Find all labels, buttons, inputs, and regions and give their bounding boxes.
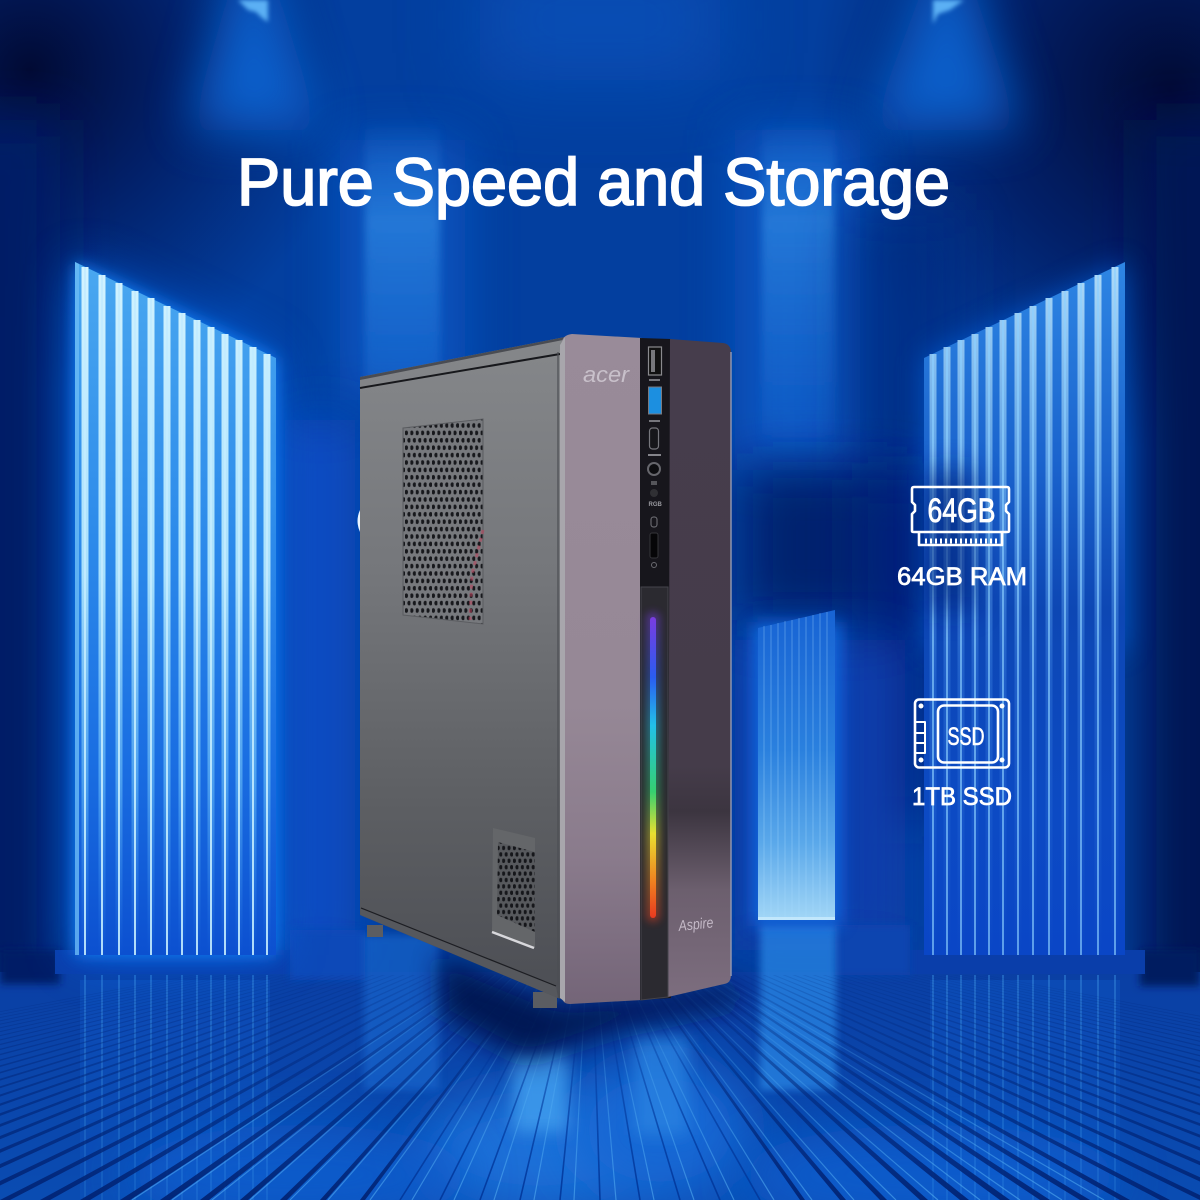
dark plum panel: [668, 339, 731, 997]
usb 3 label: [649, 420, 660, 422]
lower side vent: [492, 828, 535, 948]
aspire logo: Aspire: [677, 914, 714, 935]
dark centre strip: [640, 338, 671, 1000]
superspeed symbol: [648, 454, 661, 456]
ports column: [648, 347, 662, 568]
ram label: 64GB RAM: [897, 563, 1027, 591]
floor perspective lines: [0, 975, 1200, 1200]
acer logo: acer: [583, 362, 631, 387]
power icon: [652, 562, 656, 568]
headphone symbol: [651, 481, 657, 485]
icon: ssd drive: [915, 700, 1009, 768]
floor reflections of the light panels: [80, 975, 1120, 1200]
ssd label: 1TB SSD: [912, 783, 1012, 811]
small background light panel: [752, 610, 842, 926]
rgb label: RGB: [648, 502, 662, 508]
left light panel: [75, 262, 276, 955]
usb a port: [648, 347, 662, 375]
power button: [650, 533, 658, 558]
ram icon text: 64GB: [928, 492, 996, 530]
spec: ram: [897, 487, 1027, 591]
tower floor shadow: [440, 955, 745, 1060]
usb symbol: [649, 379, 660, 381]
title: Pure Speed and Storage: [237, 145, 950, 220]
usb c port: [650, 428, 658, 449]
drive indicator: [651, 517, 657, 527]
upper side vent: [403, 419, 483, 624]
floor: [0, 900, 1200, 1200]
usb 3 blue port: [648, 387, 662, 414]
side panel: [360, 337, 565, 1000]
icon: ram module: [912, 487, 1009, 545]
rgb led strip: [641, 587, 668, 1000]
rgb button: [650, 489, 658, 497]
ssd icon text: SSD: [948, 723, 984, 751]
desktop tower: [358, 334, 731, 1008]
front lilac panel: [562, 334, 642, 1004]
audio jack: [648, 463, 660, 475]
icon: top right ceiling light: [933, 0, 964, 24]
icon: top left ceiling light: [238, 0, 268, 22]
right light panel: [924, 262, 1125, 955]
spec: ssd: [912, 700, 1012, 811]
small white crescent behind the case: [358, 510, 360, 532]
feet: [367, 925, 557, 1008]
